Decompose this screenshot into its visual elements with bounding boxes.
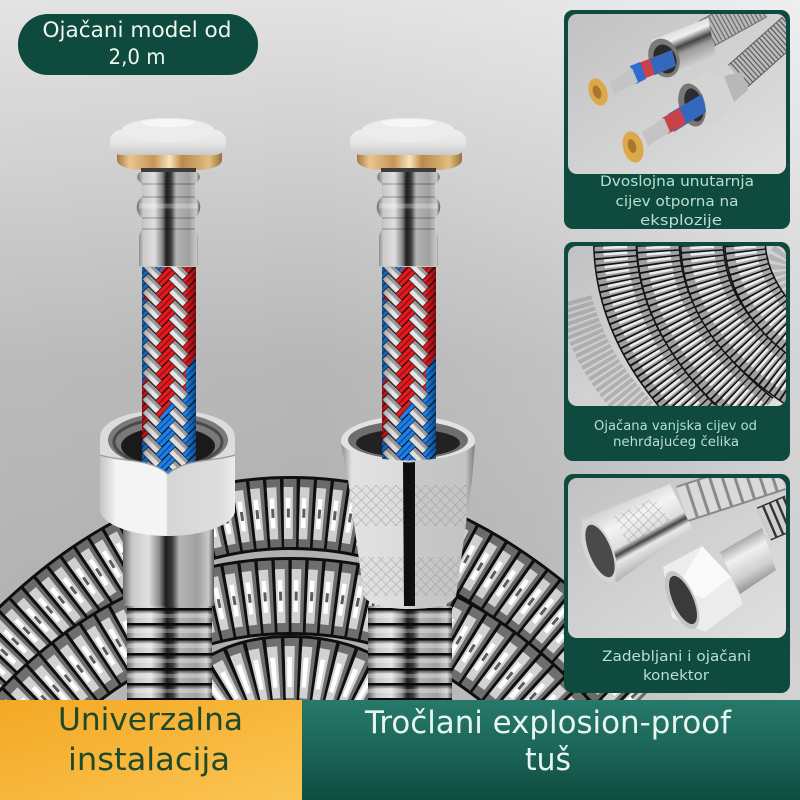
bottom banner: universal installation: instalacija — [68, 742, 230, 778]
bottom banner: universal installation — [0, 700, 302, 800]
bottom banner: universal installation: Univerzalna — [58, 702, 243, 738]
left fitting: cap, neck and braided inner hose — [100, 118, 235, 479]
bottom banner: three-piece explosion-proof shower hose: Tročlani explosion-proof — [364, 705, 732, 741]
panel: thickened and reinforced connector: konektor — [643, 668, 709, 684]
panel: double-layer inner tube: cijev otporna na — [616, 194, 738, 210]
panel: reinforced stainless steel outer tube: nehrđajućeg čelika — [613, 435, 739, 450]
coiled stainless steel hose behind the fittings — [0, 513, 640, 770]
bottom banner: three-piece explosion-proof shower hose — [302, 700, 800, 800]
product photo: coiled steel hose — [568, 246, 786, 406]
callout pill: reinforced 2.0 m model: Ojačani model od — [42, 18, 232, 42]
right connector: knurled conical sleeve and hose end — [341, 444, 475, 700]
callout pill: reinforced 2.0 m model: 2,0 m — [108, 45, 166, 69]
panel: double-layer inner tube: Dvoslojna unutarnja — [600, 174, 754, 190]
panel: double-layer inner tube: eksplozije — [640, 213, 722, 229]
callout pill: reinforced 2.0 m model — [18, 14, 258, 75]
panel: thickened and reinforced connector — [564, 472, 792, 693]
panel: reinforced stainless steel outer tube: Ojačana vanjska cijev od — [594, 419, 757, 434]
panel: thickened and reinforced connector: Zadebljani i ojačani — [602, 649, 751, 665]
panel: double-layer inner tube — [564, 4, 792, 229]
bottom banner: three-piece explosion-proof shower hose: tuš — [525, 742, 571, 778]
panel: reinforced stainless steel outer tube — [564, 240, 800, 461]
right fitting: cap, neck and braided inner hose — [341, 118, 475, 479]
product photo: two fittings with braided tubes — [588, 14, 786, 163]
product photo: two chrome connectors — [581, 478, 786, 632]
left connector: hexagonal nut, sleeve and hose end — [100, 455, 235, 700]
